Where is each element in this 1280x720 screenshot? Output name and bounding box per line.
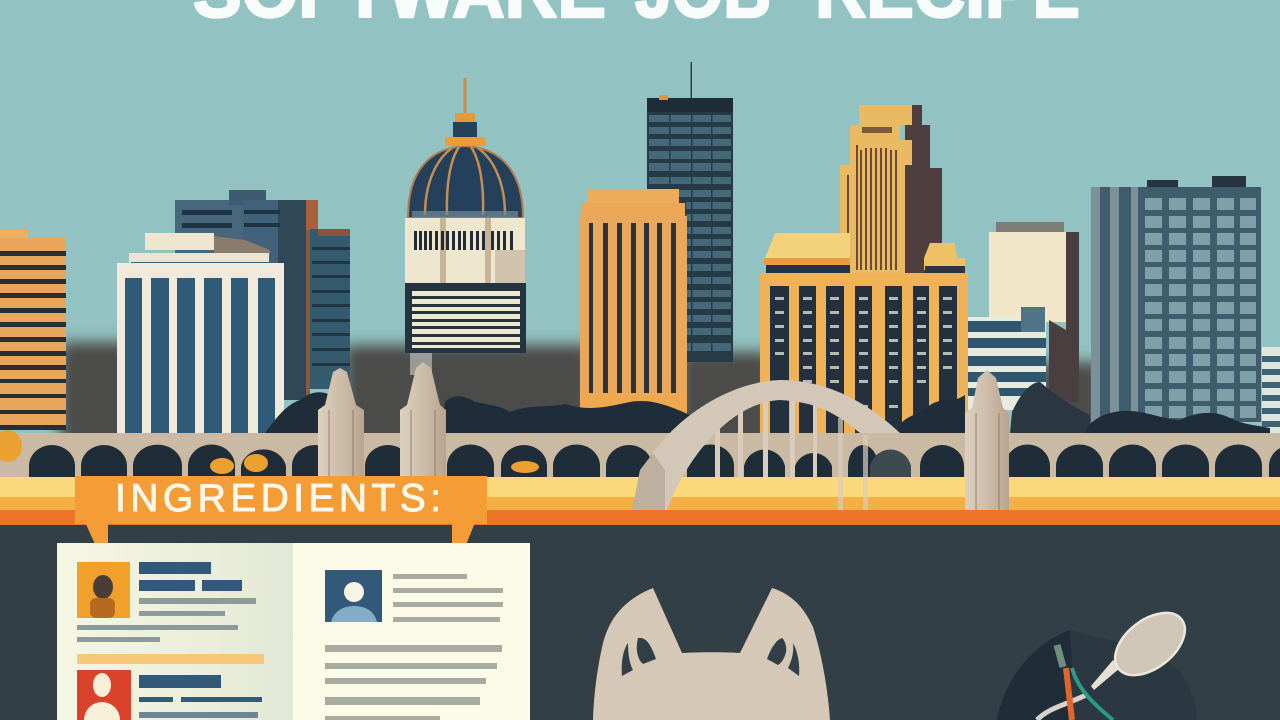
building: grey-blue office tower [1091, 176, 1261, 422]
building: domed tower [405, 78, 526, 375]
lower dark panel [0, 525, 1280, 720]
right column profile blocks [325, 570, 503, 720]
building: dark tower [647, 62, 733, 362]
icon: cat mascot [593, 588, 830, 720]
building: cream tower [989, 222, 1079, 402]
pillar: left [318, 368, 364, 476]
large arch bridge [632, 380, 900, 510]
distant haze [60, 342, 1100, 450]
building: white tower with blue columns [117, 233, 284, 433]
building: golden lower block [760, 233, 968, 433]
building: navy block behind white tower [175, 190, 350, 400]
road [0, 477, 1280, 525]
left column profile blocks [77, 562, 264, 720]
building: right edge stripes [1262, 347, 1280, 433]
icon: bowl with spoon [997, 600, 1197, 720]
banner text: INGREDIENTS: [115, 477, 441, 520]
title [193, 0, 1080, 33]
pillar: right [965, 370, 1009, 510]
building: orange striped tower [580, 189, 687, 420]
building: striped low block [968, 307, 1046, 410]
bridge deck with arches [0, 430, 1280, 477]
pillar: middle [400, 362, 446, 476]
building: left orange stripes [0, 230, 66, 430]
ingredients banner [75, 476, 487, 551]
resume document [57, 543, 530, 720]
building: golden stepped tower [840, 105, 942, 275]
tree line [265, 382, 1270, 433]
